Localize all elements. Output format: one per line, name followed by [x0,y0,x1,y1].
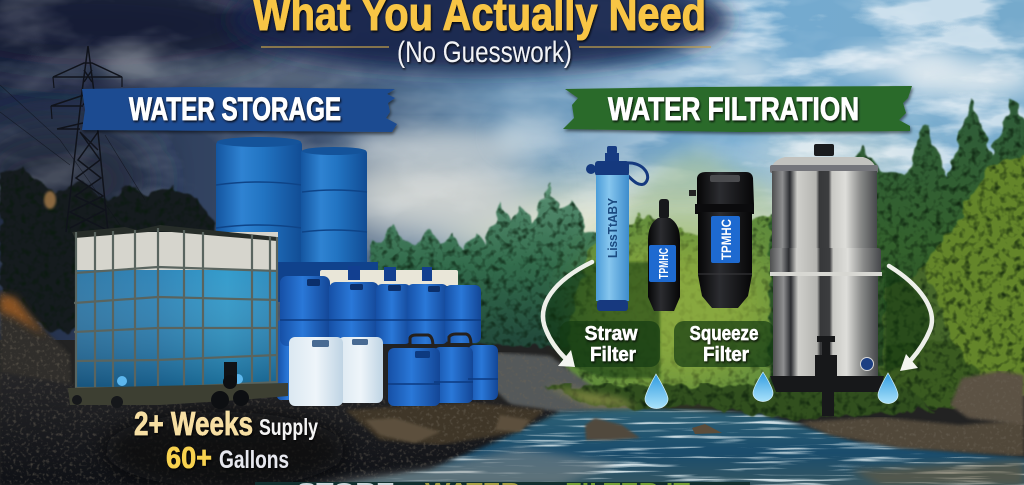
distant burning glow [44,191,56,209]
straw filter label [560,321,660,367]
IBC tote tank [68,225,288,409]
rocks [365,371,1024,456]
heading banner: water storage: WATER STORAGE [129,91,341,127]
back row jerry cans [277,262,481,400]
icon: power pylon [0,46,145,232]
squeeze filter label: Squeeze [690,323,758,345]
supply text [134,405,318,475]
right conifer forest [770,97,1024,400]
heading banner: water filtration: WATER FILTRATION [608,91,859,127]
subtitle: (No Guesswork) [397,36,572,69]
centre bright forest [560,215,790,395]
squeeze filter label [674,321,774,367]
icon: water drop middle [753,372,773,402]
supply text: 2+ Weeks [134,405,253,442]
middle conifer forest [366,183,610,345]
squeeze filter label: Filter [703,344,749,366]
title dark halo [230,0,730,72]
river [290,408,1024,485]
left dark forest [0,168,216,330]
icon: straw filter: LissTtABY [605,198,620,258]
front blue jerry cans [388,334,498,406]
burnt hillside [0,290,72,384]
straw filter label: Filter [590,344,636,366]
icon: straw filter [586,146,648,311]
supply text: Supply [259,414,318,440]
white jerry cans [289,337,383,406]
straw filter label: Straw [584,323,638,345]
arrow: curved right [889,266,932,371]
icon: gravity filter [770,144,884,416]
panel: water filtration [543,86,932,416]
text vignette [105,412,345,485]
icon: small squeeze bottle [648,199,680,311]
icon: squeeze canister: TPMHC [718,219,734,260]
left dark oval backdrop [545,262,660,378]
blue barrels [216,137,367,268]
icon: small squeeze bottle: TPMHC [656,248,671,279]
panel: water storage [68,87,498,475]
icon: squeeze canister [689,172,754,308]
supply text: 60+ [166,440,212,475]
right yellow-green foliage [880,150,1024,405]
supply text: Gallons [219,446,289,474]
dark ground [0,372,560,485]
cropped bottom strip [255,480,750,485]
gravel stream behind filters [498,352,630,413]
hazy mountain [629,146,772,236]
title [253,0,706,69]
green river bank [545,385,935,420]
right dark oval backdrop [885,265,930,372]
icon: water drop left [645,374,668,408]
arrow: curved left [543,262,592,367]
sky [0,0,1024,340]
heading banner: water filtration [563,86,912,132]
heading banner: water storage [82,87,397,132]
icon: water drop right [878,373,898,404]
